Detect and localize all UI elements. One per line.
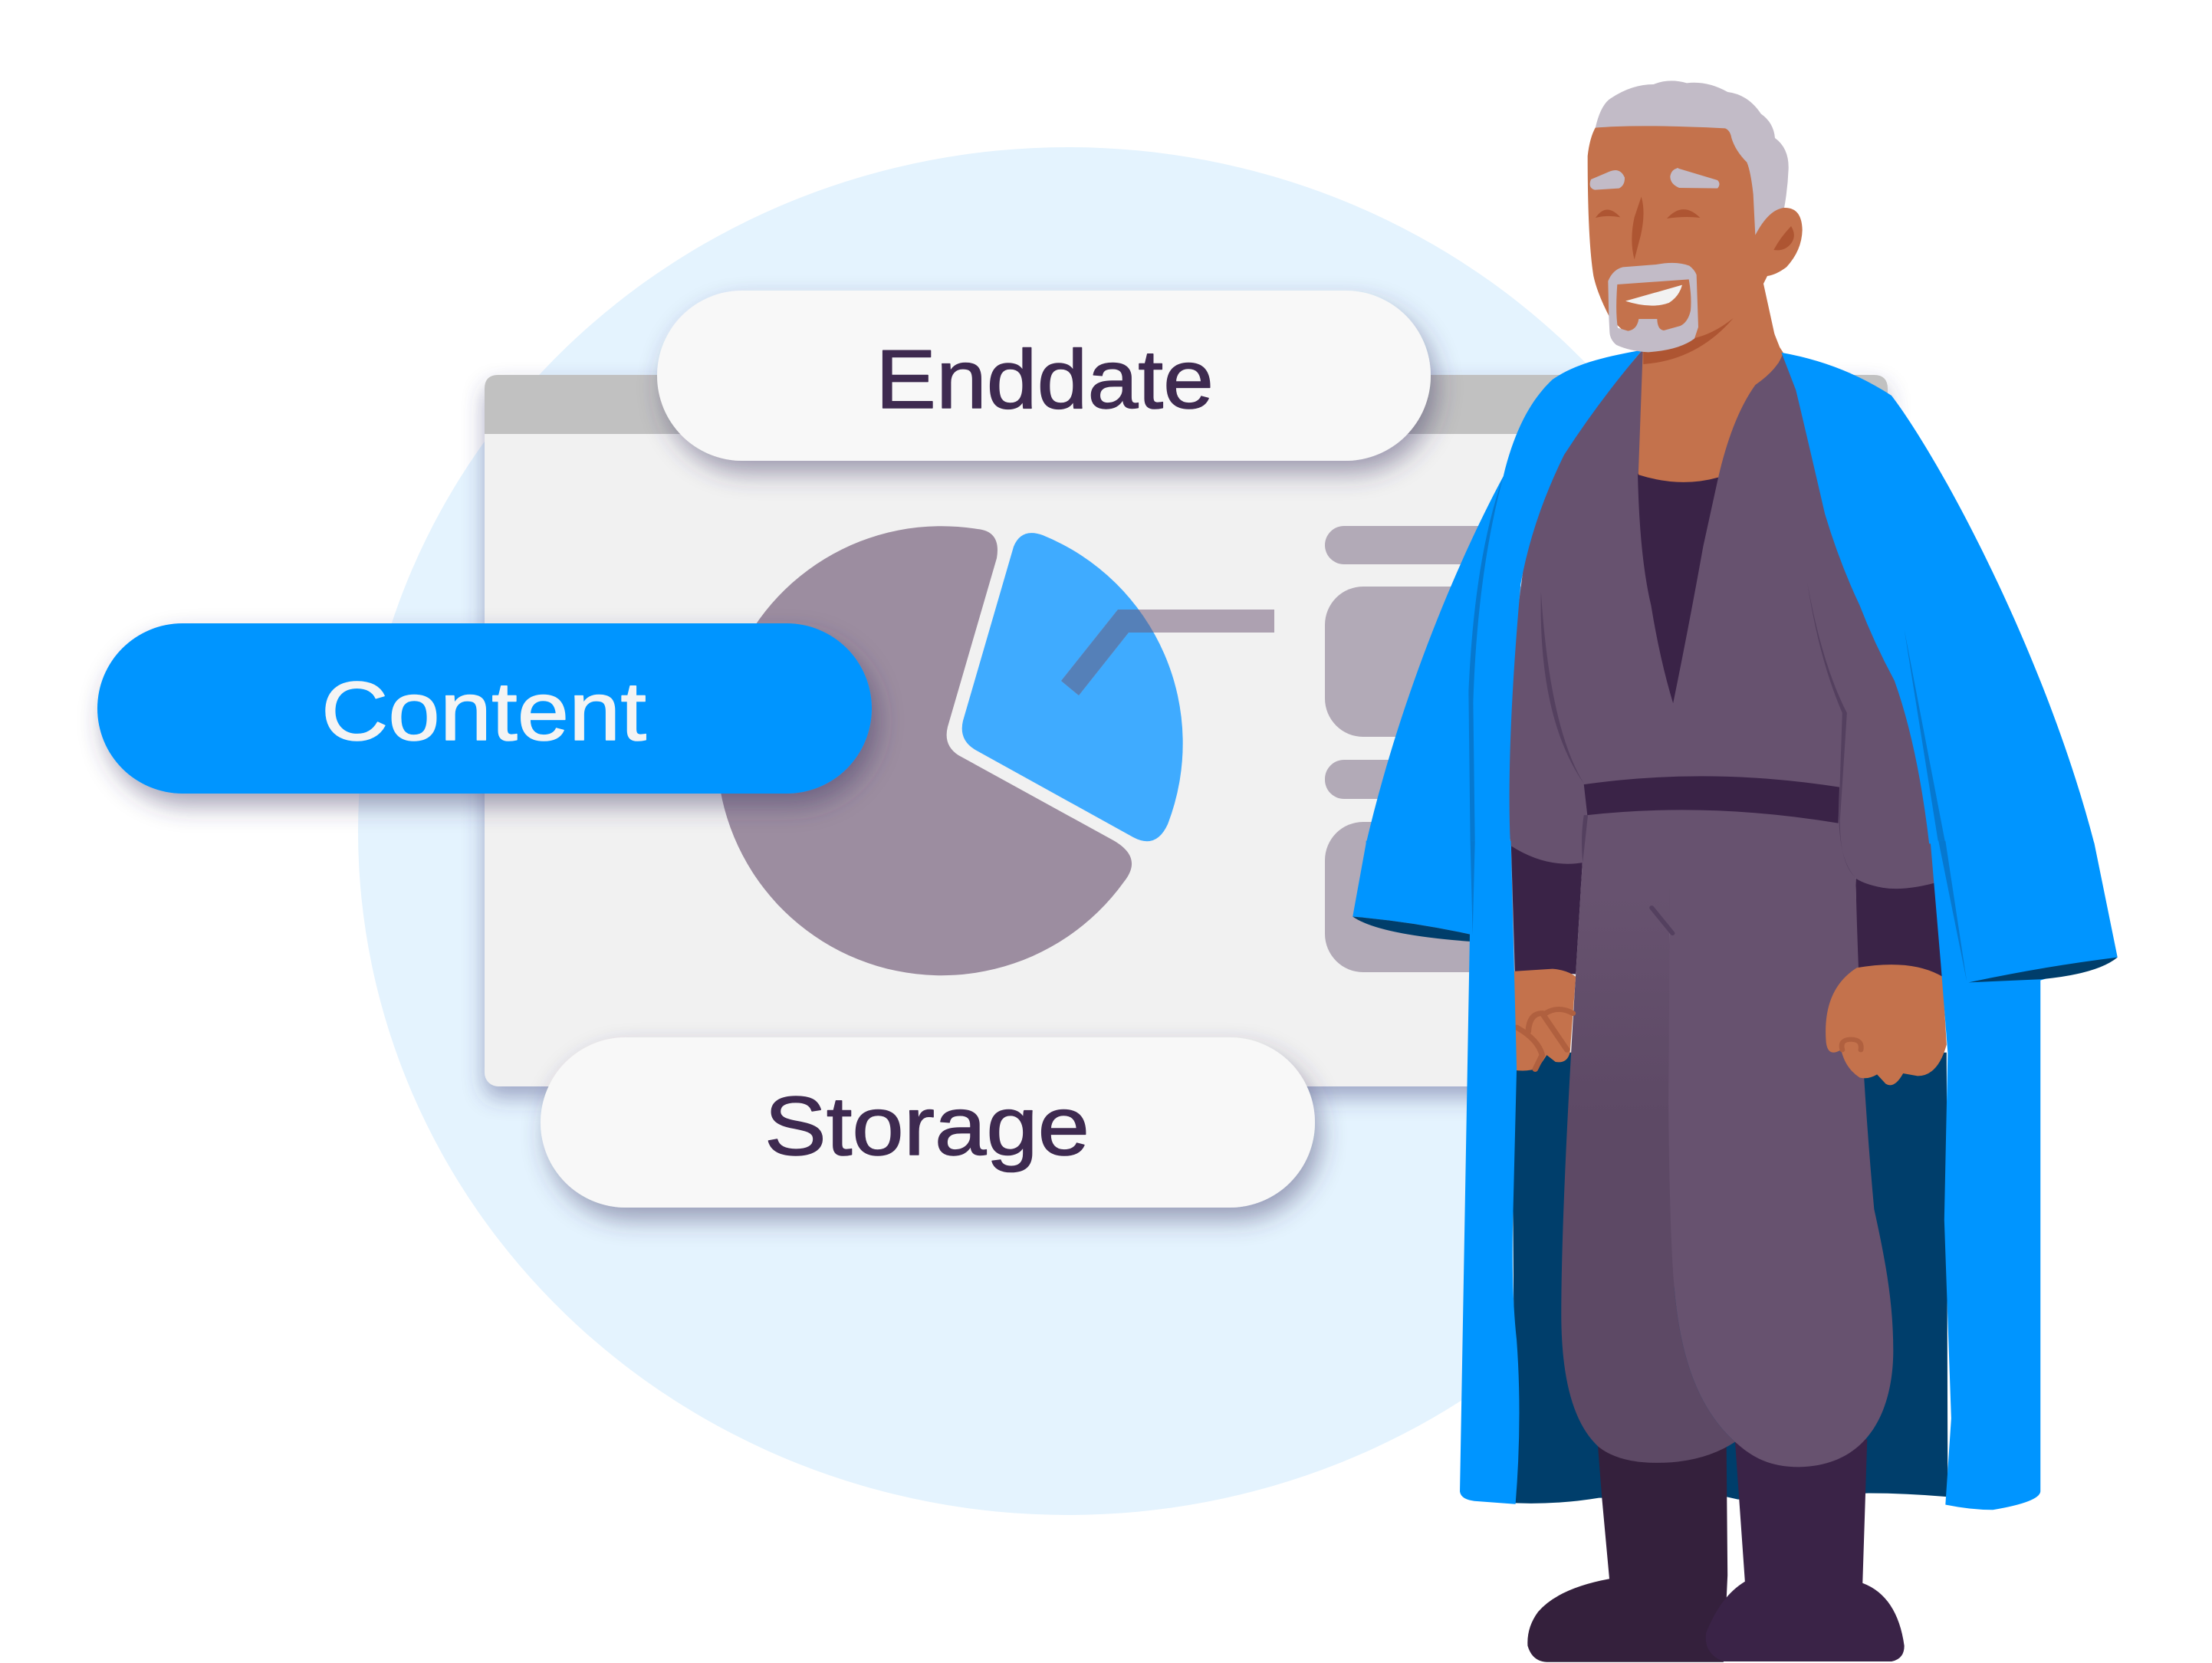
pill: Enddate (657, 291, 1431, 461)
face and neck (1588, 126, 1803, 363)
lower cape (1353, 841, 2118, 1510)
panel: dashboard window (485, 375, 1888, 1086)
window title bar (485, 375, 1888, 434)
right eye (1667, 209, 1700, 219)
left cuff (1511, 838, 1584, 974)
pill: Content: Content (321, 665, 646, 758)
cape fold: sleeve (1938, 841, 1967, 982)
undershirt (1638, 474, 1718, 703)
right boot (1706, 1439, 1905, 1661)
left boot (1527, 1444, 1727, 1662)
cape: right front (1781, 353, 2095, 843)
pill: Storage (541, 1037, 1315, 1208)
cape: left sleeve underside (1353, 916, 1473, 942)
window body (485, 375, 1888, 1086)
cape: left sleeve (1353, 841, 1477, 935)
cape folds (1468, 476, 1945, 843)
leader line (1061, 610, 1274, 695)
robe torso (1500, 350, 1941, 889)
neck shadow (1643, 318, 1734, 364)
pie chart (717, 526, 1183, 975)
left eye (1596, 209, 1620, 218)
head (1588, 81, 1803, 364)
pie: blue slice (962, 533, 1183, 841)
robe creases (1541, 584, 1855, 877)
belt (1584, 776, 1839, 823)
pocket mark (1652, 908, 1672, 933)
upper body (1366, 315, 2095, 889)
pill: Enddate: Enddate (876, 333, 1214, 426)
pill: Content (97, 623, 872, 794)
right eyebrow (1670, 168, 1719, 189)
cape inner lining (1512, 1053, 1947, 1504)
left eyebrow (1590, 170, 1625, 190)
legend blocks (1325, 526, 1632, 972)
cape: left panel (1460, 841, 1520, 1504)
right trouser leg (1668, 838, 1893, 1467)
right hand (1826, 965, 1947, 1085)
beard (1608, 263, 1698, 352)
background circle (358, 147, 1778, 1515)
nose (1632, 197, 1644, 259)
right cuff (1855, 864, 1943, 977)
teeth (1625, 285, 1682, 306)
left hand (1512, 969, 1576, 1071)
pill: Storage: Storage (764, 1080, 1090, 1173)
pie: large grey slice (717, 526, 1132, 975)
cape: right sleeve underside (1969, 958, 2118, 982)
neck (1638, 315, 1783, 482)
cape fold: left edge (1471, 841, 1475, 935)
hair (1596, 81, 1789, 238)
character: man in blue cape (1353, 81, 2118, 1662)
lower body (1511, 838, 1947, 1662)
cape: right panel and sleeve (1931, 841, 2118, 1510)
ear inner (1773, 226, 1794, 250)
cape: left front (1366, 350, 1642, 843)
left trouser leg (1561, 838, 1735, 1463)
